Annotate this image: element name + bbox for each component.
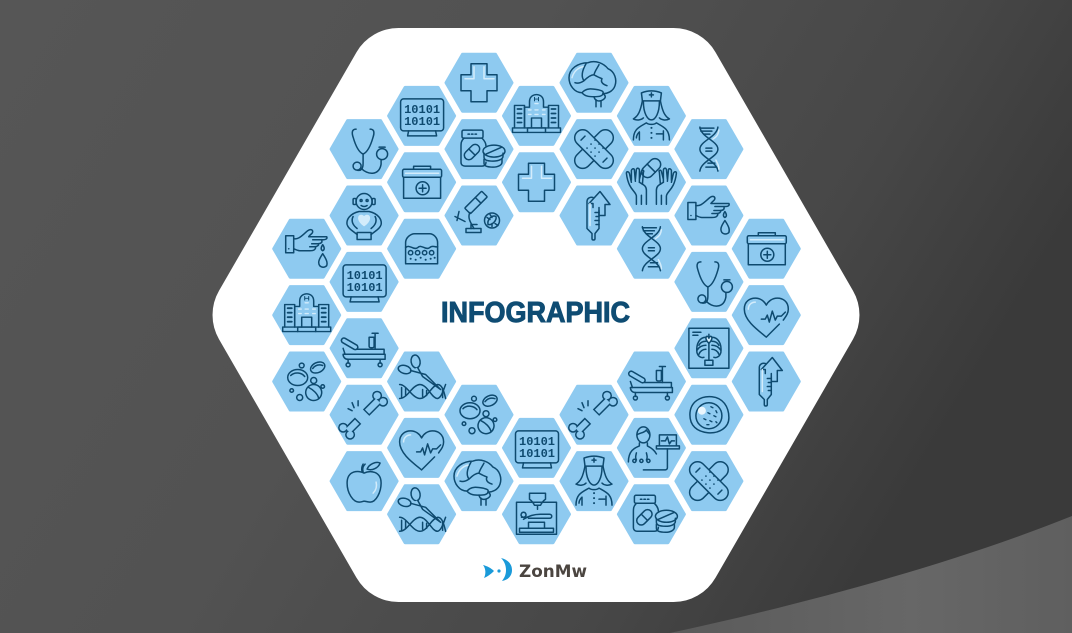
hex: brain	[446, 453, 512, 510]
hex: doctor with laptop	[618, 419, 684, 476]
hex: surgery	[504, 486, 570, 543]
hex: DNA	[676, 121, 742, 178]
hex: bandage	[561, 121, 627, 178]
logo: ZonMw	[483, 558, 587, 581]
hex: binary monitor: 10101	[347, 281, 383, 295]
hex: binary monitor: 10101	[519, 435, 555, 449]
title: INFOGRAPHIC	[441, 297, 630, 329]
logo text: ZonMw	[519, 562, 587, 581]
hex: cross	[504, 154, 570, 211]
hex: x-ray	[676, 320, 742, 377]
hex: DNA scissors	[389, 353, 455, 410]
hex: thermometer	[733, 353, 799, 410]
hex: binary monitor	[504, 419, 570, 476]
hex: skin layers	[389, 220, 455, 277]
hex: hands with capsule	[618, 154, 684, 211]
hex: nurse	[561, 453, 627, 510]
hex: stethoscope	[676, 253, 742, 310]
hex: blood drop hand	[274, 220, 340, 277]
hex: cross	[446, 54, 512, 111]
background swoosh	[670, 516, 1072, 633]
hex: stethoscope	[331, 121, 397, 178]
hex: broken bone	[331, 386, 397, 443]
hex: hospital bed	[618, 353, 684, 410]
hex: cell	[676, 386, 742, 443]
hex: hospital bed	[331, 320, 397, 377]
hex: broken bone	[561, 386, 627, 443]
hex: heartbeat	[389, 419, 455, 476]
hex: pill jar	[446, 121, 512, 178]
hex: pill jar	[618, 486, 684, 543]
hex: hospital	[504, 87, 570, 144]
hex: robot	[331, 187, 397, 244]
hex: binary monitor: 10101	[404, 115, 440, 129]
hex: heartbeat	[733, 287, 799, 344]
hex: binary monitor	[389, 87, 455, 144]
hex: blood cells	[446, 386, 512, 443]
panel: white hexagon	[213, 28, 859, 602]
hex: apple	[331, 453, 397, 510]
hex: binary monitor	[331, 253, 397, 310]
hex: thermometer	[561, 187, 627, 244]
hex: binary monitor: 10101	[519, 447, 555, 461]
hex: DNA	[618, 220, 684, 277]
hex: nurse	[618, 87, 684, 144]
hex: hospital	[274, 287, 340, 344]
hex: microscope	[446, 187, 512, 244]
hex: blood drop hand	[676, 187, 742, 244]
hex: DNA scissors	[389, 486, 455, 543]
hex: brain	[561, 54, 627, 111]
hex: bandage	[676, 453, 742, 510]
logo mark	[483, 558, 512, 581]
hex: binary monitor: 10101	[347, 269, 383, 283]
hex: first aid kit	[389, 154, 455, 211]
hex: blood cells	[274, 353, 340, 410]
hex: first aid kit	[733, 220, 799, 277]
hex: binary monitor: 10101	[404, 103, 440, 117]
